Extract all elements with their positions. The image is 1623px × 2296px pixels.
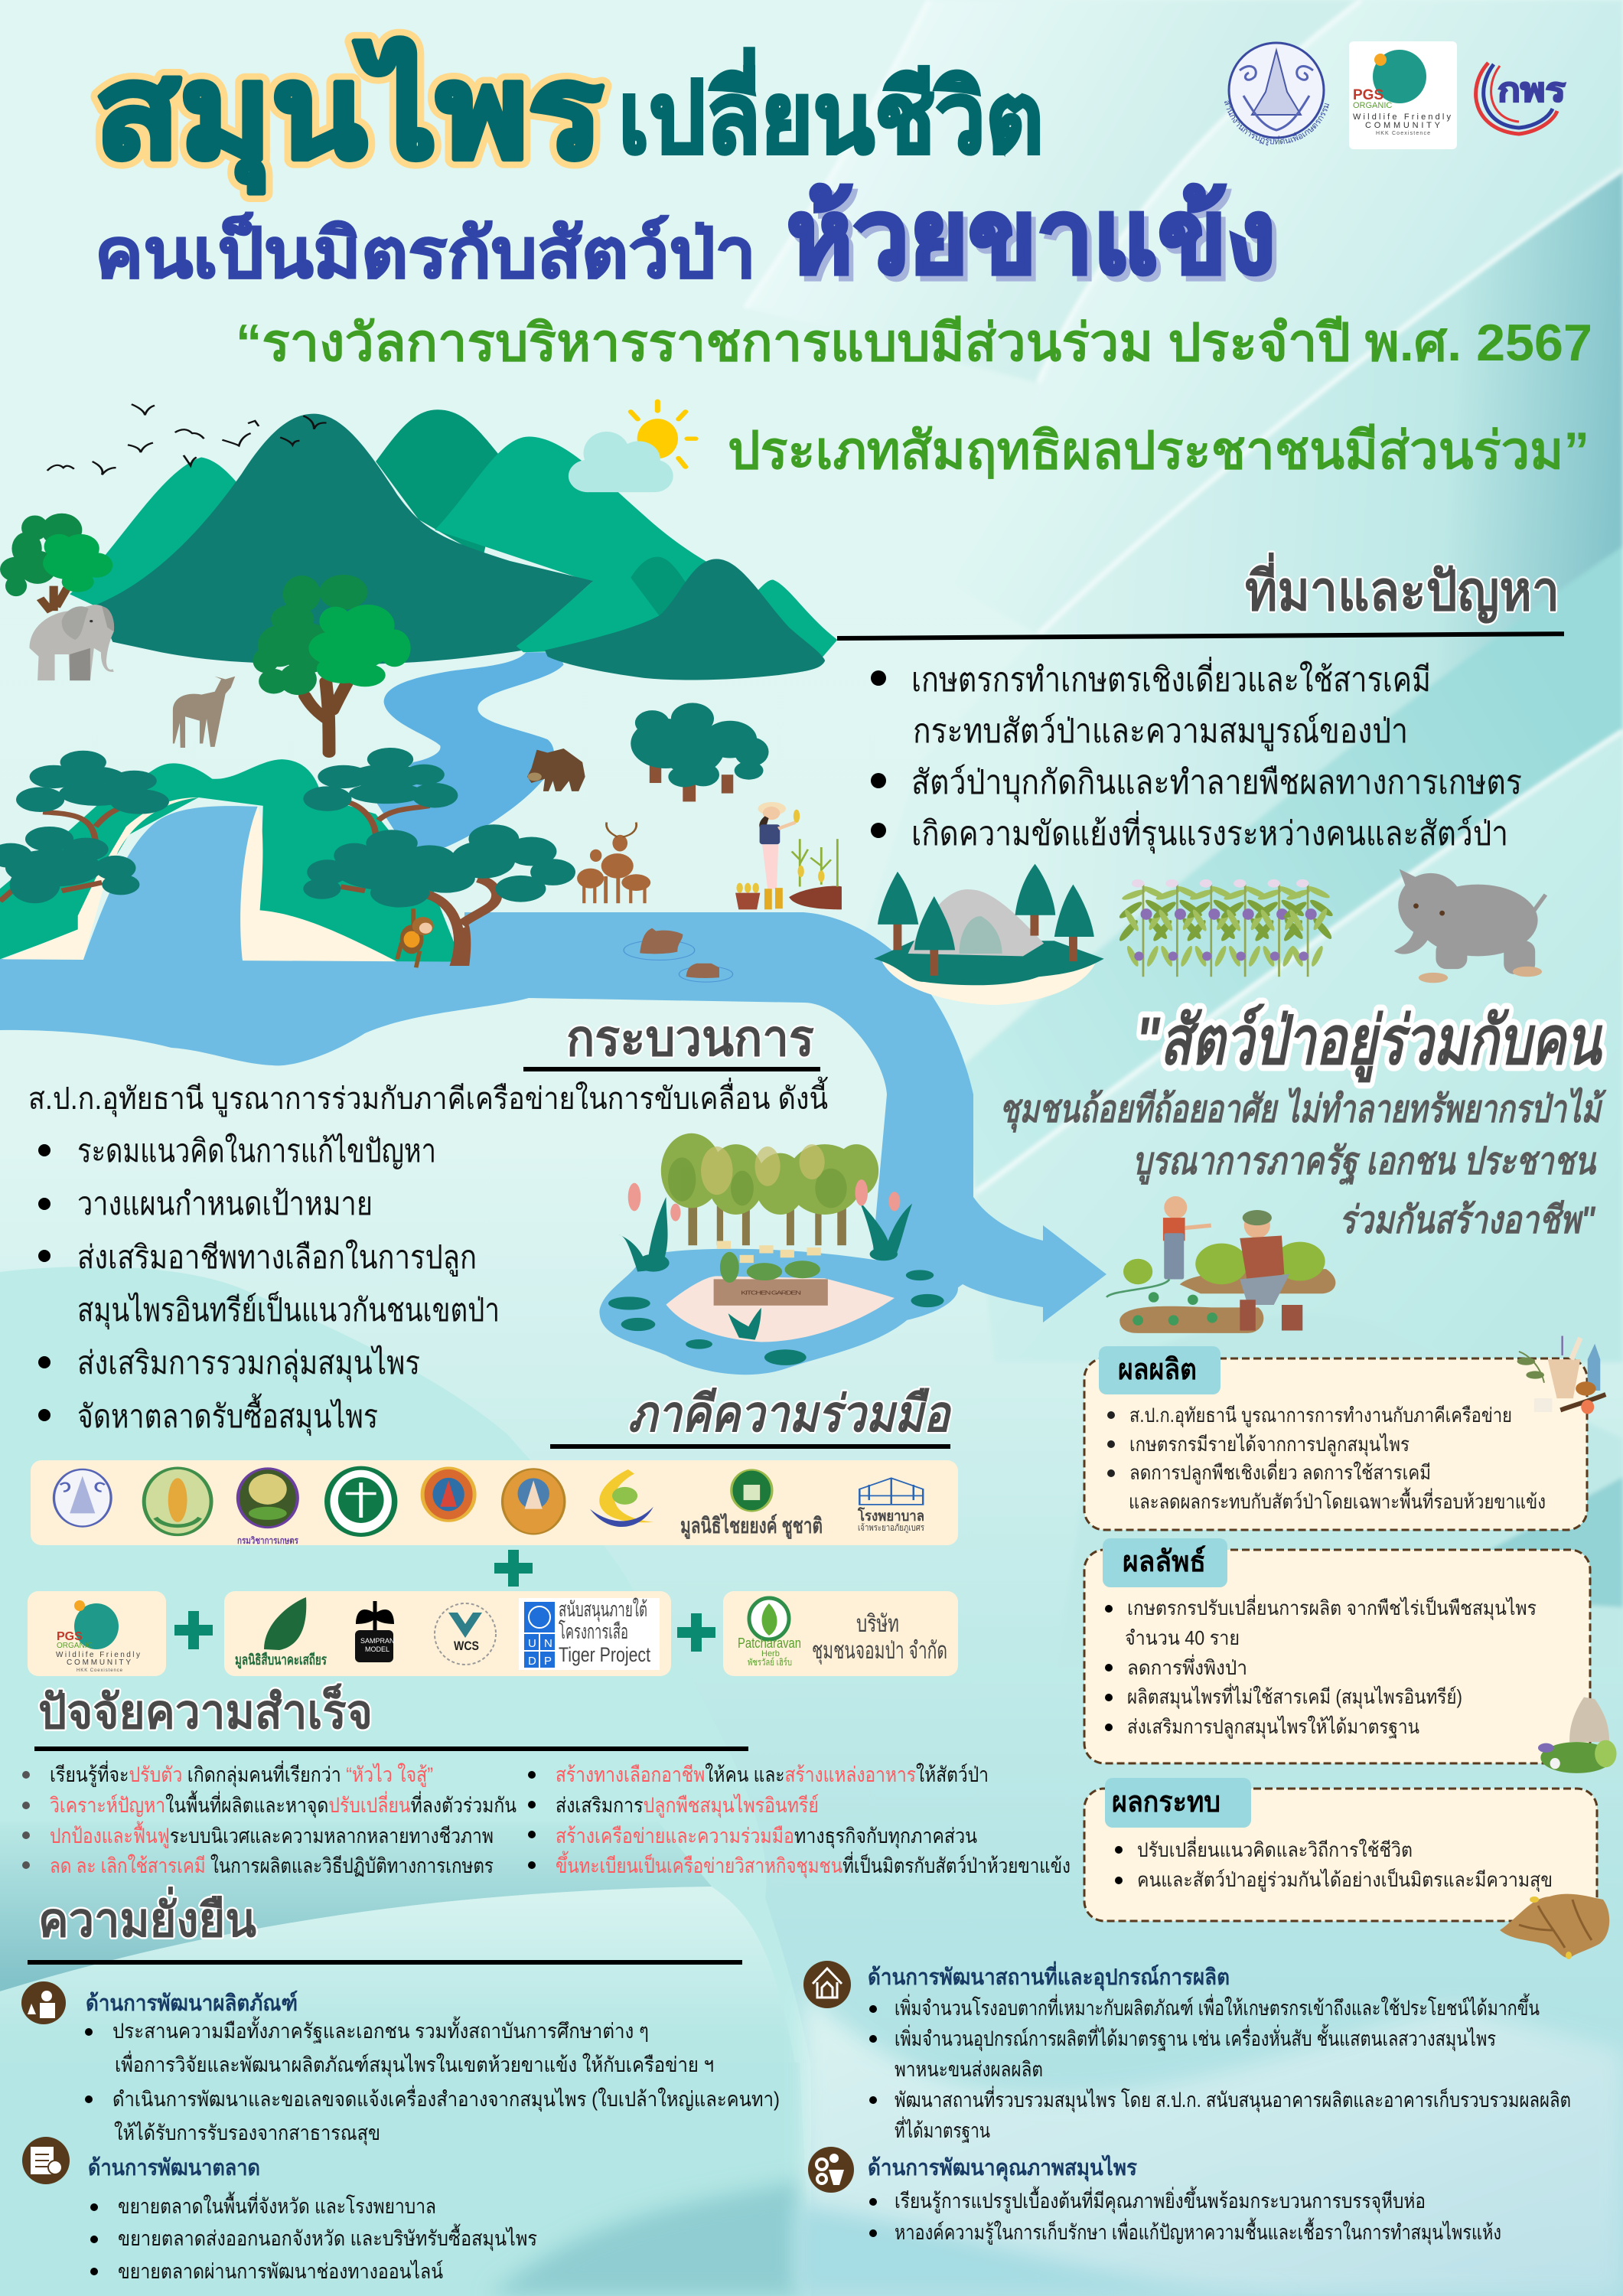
logo: UNDP Tiger Project	[519, 1597, 660, 1670]
factors right column: สร้างเครือข่ายและความร่วมมือทางธุรกิจกับทุกภาคส่วน	[556, 1825, 977, 1849]
logo: PGS wildlife friendly	[1349, 41, 1457, 149]
green land	[0, 759, 461, 962]
foreground pine trees	[0, 748, 575, 962]
product development	[21, 1981, 780, 2146]
pond	[599, 1249, 958, 1375]
icon: herb mortar	[1517, 1336, 1605, 1414]
results column	[1084, 1336, 1617, 1959]
farmers	[1106, 1196, 1335, 1333]
logo: ALRO seal	[1224, 41, 1330, 145]
title: friendly people: คนเป็นมิตรกับสัตว์ป่า	[95, 211, 756, 292]
heading: partners: ภาคีความร่วมมือ	[628, 1385, 952, 1442]
process list: สมุนไพรอินทรีย์เป็นแนวกันชนเขตป่า	[77, 1291, 500, 1330]
panel: foundations	[224, 1591, 671, 1676]
farmer woman	[758, 802, 800, 909]
corn field	[789, 839, 842, 909]
logo: UNDP Tiger Project: U	[528, 1637, 536, 1650]
process list: จัดหาตลาดรับซื้อสมุนไพร	[77, 1393, 378, 1437]
sun	[631, 401, 696, 467]
top-right section: origin and problems	[837, 552, 1564, 854]
herb quality development	[808, 2147, 1501, 2245]
panel: outputs: ส.ป.ก.อุทัยธานี บูรณาการการทำงานกับภาคีเครือข่าย	[1129, 1404, 1512, 1427]
panel: outputs	[1084, 1346, 1587, 1530]
process list: ส่งเสริมการรวมกลุ่มสมุนไพร	[77, 1345, 420, 1383]
panel: PGS community	[28, 1591, 166, 1676]
process list: ส่งเสริมอาชีพทางเลือกในการปลูก	[77, 1239, 477, 1277]
grey elephant	[1394, 869, 1546, 983]
partner names: เจ้าพระยาอภัยภูเบศร	[858, 1522, 924, 1534]
award subtitle: “รางวัลการบริหารราชการแบบมีส่วนร่วม ประจำปี พ.ศ. 2567	[236, 314, 1592, 372]
front mountain	[545, 559, 825, 680]
success factors section	[22, 1683, 1071, 1879]
partner names	[237, 1507, 924, 1546]
logo: Seub foundation: มูลนิธิสืบนาคะเสถียร	[235, 1652, 328, 1669]
process list: ระดมแนวคิดในการแก้ไขปัญหา	[77, 1133, 436, 1169]
logos top right	[1224, 41, 1567, 149]
process section	[28, 1009, 829, 1437]
title: Huai Kha Khaeng: ห้วยขาแข้ง	[787, 179, 1276, 295]
panel: PGS community: COMMUNITY	[67, 1658, 131, 1667]
panel: outputs: และลดผลกระทบกับสัตว์ป่าโดยเฉพาะพื้นที่รอบห้วยขาแข้ง	[1129, 1487, 1546, 1513]
island with cave	[874, 864, 1104, 1005]
icon: herb sachet	[1538, 1697, 1617, 1773]
logos: agencies	[54, 1468, 923, 1534]
market development: ขยายตลาดในพื้นที่จังหวัด และโรงพยาบาล	[118, 2191, 436, 2218]
logo: UNDP Tiger Project: N	[544, 1637, 552, 1650]
lily pads	[608, 1270, 944, 1365]
factors right column	[528, 1763, 1071, 1879]
market development: ขยายตลาดผ่านการพัฒนาช่องทางออนไลน์	[118, 2259, 443, 2283]
panel: outputs: ลดการปลูกพืชเชิงเดี่ยว ลดการใช้สารเคมี	[1129, 1459, 1431, 1485]
garden box	[714, 1241, 828, 1306]
panel: PGS community: ORGANIC	[57, 1642, 93, 1650]
logo: Sampran model: MODEL	[365, 1645, 389, 1653]
panel: impact	[1084, 1778, 1597, 1921]
cloud	[569, 432, 673, 492]
facility development: ด้านการพัฒนาสถานที่และอุปกรณ์การผลิต	[868, 1961, 1230, 1991]
panel: PGS community: PGS	[57, 1630, 83, 1643]
logo: UNDP Tiger Project: D	[528, 1655, 536, 1668]
panel: Patcharavan: พัชรวัลย์ เฮิร์บ	[748, 1657, 792, 1668]
heading: sustainability: ความยั่งยืน	[38, 1887, 256, 1947]
logo: PGS wildlife friendly: PGS	[1353, 87, 1383, 103]
logo: WCS	[435, 1603, 496, 1665]
logo: UNDP Tiger Project: Tiger Project	[559, 1643, 650, 1666]
motto block	[999, 1003, 1607, 1241]
process list: วางแผนกำหนดเป้าหมาย	[77, 1186, 373, 1221]
logo: Seub foundation	[235, 1597, 328, 1669]
title: herbs: สมุนไพร	[95, 38, 603, 193]
logo: UNDP Tiger Project: P	[544, 1655, 552, 1668]
icon: ginger root	[1500, 1894, 1609, 1959]
scene upper	[0, 401, 842, 1005]
upper river	[376, 652, 564, 851]
title shadow: ห้วยขาแข้ง	[791, 184, 1280, 300]
icon: house	[803, 1961, 851, 2008]
problems list: เกิดความขัดแย้งที่รุนแรงระหว่างคนและสัตว์ป่า	[911, 810, 1508, 854]
logo: OPDC	[1476, 63, 1566, 134]
deer family	[577, 823, 650, 903]
plus	[494, 1550, 533, 1587]
process intro: ส.ป.ก.อุทัยธานี บูรณาการร่วมกับภาคีเครือข่ายในการขับเคลื่อน ดังนี้	[28, 1076, 829, 1117]
panel: outputs: เกษตรกรมีรายได้จากการปลูกสมุนไพร	[1129, 1433, 1410, 1456]
lake and river with arrow	[0, 912, 1106, 1322]
panel: Patcharavan: บริษัท	[856, 1610, 899, 1637]
panel: outcomes: ส่งเสริมการปลูกสมุนไพรให้ได้มาตรฐาน	[1127, 1715, 1419, 1739]
problems list: กระทบสัตว์ป่าและความสมบูรณ์ของป่า	[913, 713, 1408, 752]
logo: PGS wildlife friendly: Wildlife Friendly	[1353, 113, 1451, 122]
product development: เพื่อการวิจัยและพัฒนาผลิตภัณฑ์สมุนไพรในเขตห้วยขาแข้ง ให้กับเครือข่าย ฯ	[115, 2050, 714, 2078]
landscape illustration	[0, 401, 1106, 1322]
process list	[38, 1133, 500, 1437]
product development: ด้านการพัฒนาผลิตภัณฑ์	[86, 1990, 298, 2016]
factors right column: สร้างทางเลือกอาชีพให้คน และสร้างแหล่งอาหารให้สัตว์ป่า	[556, 1763, 989, 1786]
partner names: โรงพยาบาล	[857, 1507, 924, 1525]
corn basket	[735, 883, 760, 909]
facility development: เพิ่มจำนวนอุปกรณ์การผลิตที่ได้มาตรฐาน เช่น เครื่องหั่นสับ ชั้นแสตนเลสวางสมุนไพร	[895, 2024, 1496, 2052]
herb quality development: ด้านการพัฒนาคุณภาพสมุนไพร	[868, 2154, 1137, 2181]
right teal trees	[631, 703, 769, 801]
logo: Sampran model: SAMPRAN	[360, 1637, 395, 1645]
logo: WCS: WCS	[454, 1639, 479, 1653]
heading: success factors: ปัจจัยความสำเร็จ	[38, 1683, 373, 1739]
partner names: มูลนิธิไชยยงค์ ชูชาติ	[680, 1513, 823, 1539]
title	[95, 38, 1280, 300]
factors right column: ขึ้นทะเบียนเป็นเครือข่ายวิสาหกิจชุมชนที่เป็นมิตรกับสัตว์ป่าห้วยขาแข้ง	[556, 1851, 1071, 1879]
panel: Patcharavan: Herb	[761, 1649, 780, 1658]
factors left column: ปกป้องและฟื้นฟูระบบนิเวศและความหลากหลายทางชีวภาพ	[50, 1821, 494, 1848]
market development	[22, 2137, 537, 2283]
facility development	[803, 1961, 1571, 2143]
panel: government partners	[31, 1460, 958, 1546]
problems list: เกษตรกรทำเกษตรเชิงเดี่ยวและใช้สารเคมี	[911, 656, 1431, 699]
panel: Patcharavan	[723, 1591, 958, 1676]
icon: scientist	[21, 1981, 66, 2024]
panel: Patcharavan: ชุมชนจอมป่า จำกัด	[812, 1637, 947, 1665]
problem illustrations	[874, 864, 1546, 1333]
kitchen garden pond illustration	[599, 1133, 958, 1375]
heading: process: กระบวนการ	[566, 1009, 814, 1066]
panel: Patcharavan: Patcharavan	[738, 1636, 801, 1651]
factors right column: ส่งเสริมการปลูกพืชสมุนไพรอินทรีย์	[556, 1793, 819, 1818]
logo: UNDP Tiger Project: สนับสนุนภายใต้	[559, 1597, 647, 1623]
left tree	[0, 514, 112, 612]
panel: outputs: ผลผลิต	[1118, 1354, 1197, 1386]
logo: PGS wildlife friendly: HKK Coexistence	[1376, 131, 1430, 136]
logo: ALRO seal: สำนักงานการปฏิรูปที่ดินเพื่อเกษตรกรรม	[1224, 100, 1330, 145]
problems list	[871, 656, 1522, 854]
factors left column	[22, 1760, 517, 1877]
garden box: KITCHEN GARDEN	[741, 1290, 801, 1296]
island	[666, 1276, 895, 1342]
panel: outcomes: จำนวน 40 ราย	[1125, 1626, 1240, 1649]
panel: outcomes	[1084, 1538, 1590, 1763]
logo: Sampran model	[355, 1601, 395, 1662]
award subtitle	[236, 314, 1592, 480]
icon: checklist	[22, 2137, 70, 2184]
factors left column: เรียนรู้ที่จะปรับตัว เกิดกลุ่มคนที่เรียกว่า “หัวไว ใจสู้”	[50, 1760, 433, 1788]
market development: ด้านการพัฒนาตลาด	[88, 2156, 260, 2180]
award subtitle: ประเภทสัมฤทธิผลประชาชนมีส่วนร่วม”	[728, 422, 1589, 480]
facility development: ที่ได้มาตรฐาน	[895, 2116, 990, 2143]
plus	[677, 1613, 715, 1652]
monkey	[397, 908, 434, 967]
logo: PGS wildlife friendly: COMMUNITY	[1365, 121, 1441, 130]
panel: outcomes: ลดการพึ่งพิงป่า	[1127, 1654, 1247, 1679]
title outline: สมุนไพร	[95, 38, 603, 193]
market development: ขยายตลาดส่งออกนอกจังหวัด และบริษัทรับซื้อสมุนไพร	[118, 2223, 537, 2252]
factors left column: ลด ละ เลิกใช้สารเคมี ในการผลิตและวิธีปฏิบัติทางการเกษตร	[50, 1854, 494, 1877]
panel: outcomes: ผลลัพธ์	[1123, 1545, 1206, 1578]
plus	[174, 1611, 213, 1649]
heading: origin: ที่มาและปัญหา	[1245, 552, 1559, 624]
mountains	[70, 409, 837, 664]
product development: ให้ได้รับการรับรองจากสาธารณสุข	[114, 2121, 380, 2146]
big tree	[253, 575, 411, 752]
logo: PGS wildlife friendly: ORGANIC	[1353, 101, 1392, 110]
waterfall	[83, 806, 258, 962]
product development: ประสานความมือทั้งภาครัฐและเอกชน รวมทั้งสถาบันการศึกษาต่าง ๆ	[112, 2016, 649, 2043]
herb quality development: เรียนรู้การแปรรูปเบื้องต้นที่มีคุณภาพยิ่งขึ้นพร้อมกระบวนการบรรจุหีบห่อ	[895, 2186, 1426, 2214]
sustainability section	[21, 1887, 1571, 2283]
panel: outcomes: ผลิตสมุนไพรที่ไม่ใช้สารเคมี (สมุนไพรอินทรีย์)	[1127, 1683, 1462, 1709]
capybaras	[624, 928, 733, 982]
birds	[47, 404, 327, 475]
facility development: พาหนะขนส่งผลผลิต	[895, 2058, 1043, 2081]
boar	[527, 748, 585, 791]
logo: OPDC: กพร	[1498, 72, 1566, 108]
reeds	[618, 1197, 912, 1340]
partners section	[28, 1385, 958, 1676]
panel: outcomes: เกษตรกรปรับเปลี่ยนการผลิต จากพืชไร่เป็นพืชสมุนไพร	[1127, 1594, 1537, 1620]
problems list: สัตว์ป่าบุกกัดกินและทำลายพืชผลทางการเกษตร	[911, 764, 1522, 803]
panel: impact: ผลกระทบ	[1112, 1786, 1221, 1818]
product development: ดำเนินการพัฒนาและขอเลขจดแจ้งเครื่องสำอางจากสมุนไพร (ใบเปล้าใหญ่และคนทา)	[112, 2085, 780, 2112]
partner names: กรมวิชาการเกษตร	[237, 1535, 298, 1546]
panel: impact: ปรับเปลี่ยนแนวคิดและวิถีการใช้ชีวิต	[1137, 1836, 1413, 1861]
panel: PGS community: Wildlife Friendly	[56, 1651, 140, 1659]
elephant left	[30, 605, 114, 680]
panel: PGS community: HKK Coexistence	[77, 1668, 123, 1673]
logo: UNDP Tiger Project: โครงการเสือ	[559, 1620, 628, 1643]
factors left column: วิเคราะห์ปัญหาในพื้นที่ผลิตและหาจุดปรับเปลี่ยนที่ลงตัวร่วมกัน	[50, 1790, 517, 1818]
deer	[173, 677, 235, 748]
herb plants	[1117, 879, 1335, 977]
icon: quality gears	[808, 2147, 854, 2193]
panel: impact: คนและสัตว์ป่าอยู่ร่วมกันได้อย่างเป็นมิตรและมีความสุข	[1137, 1867, 1553, 1892]
forest	[661, 1133, 878, 1245]
cream banks	[3, 797, 397, 962]
title: change life: เปลี่ยนชีวิต	[618, 48, 1044, 174]
